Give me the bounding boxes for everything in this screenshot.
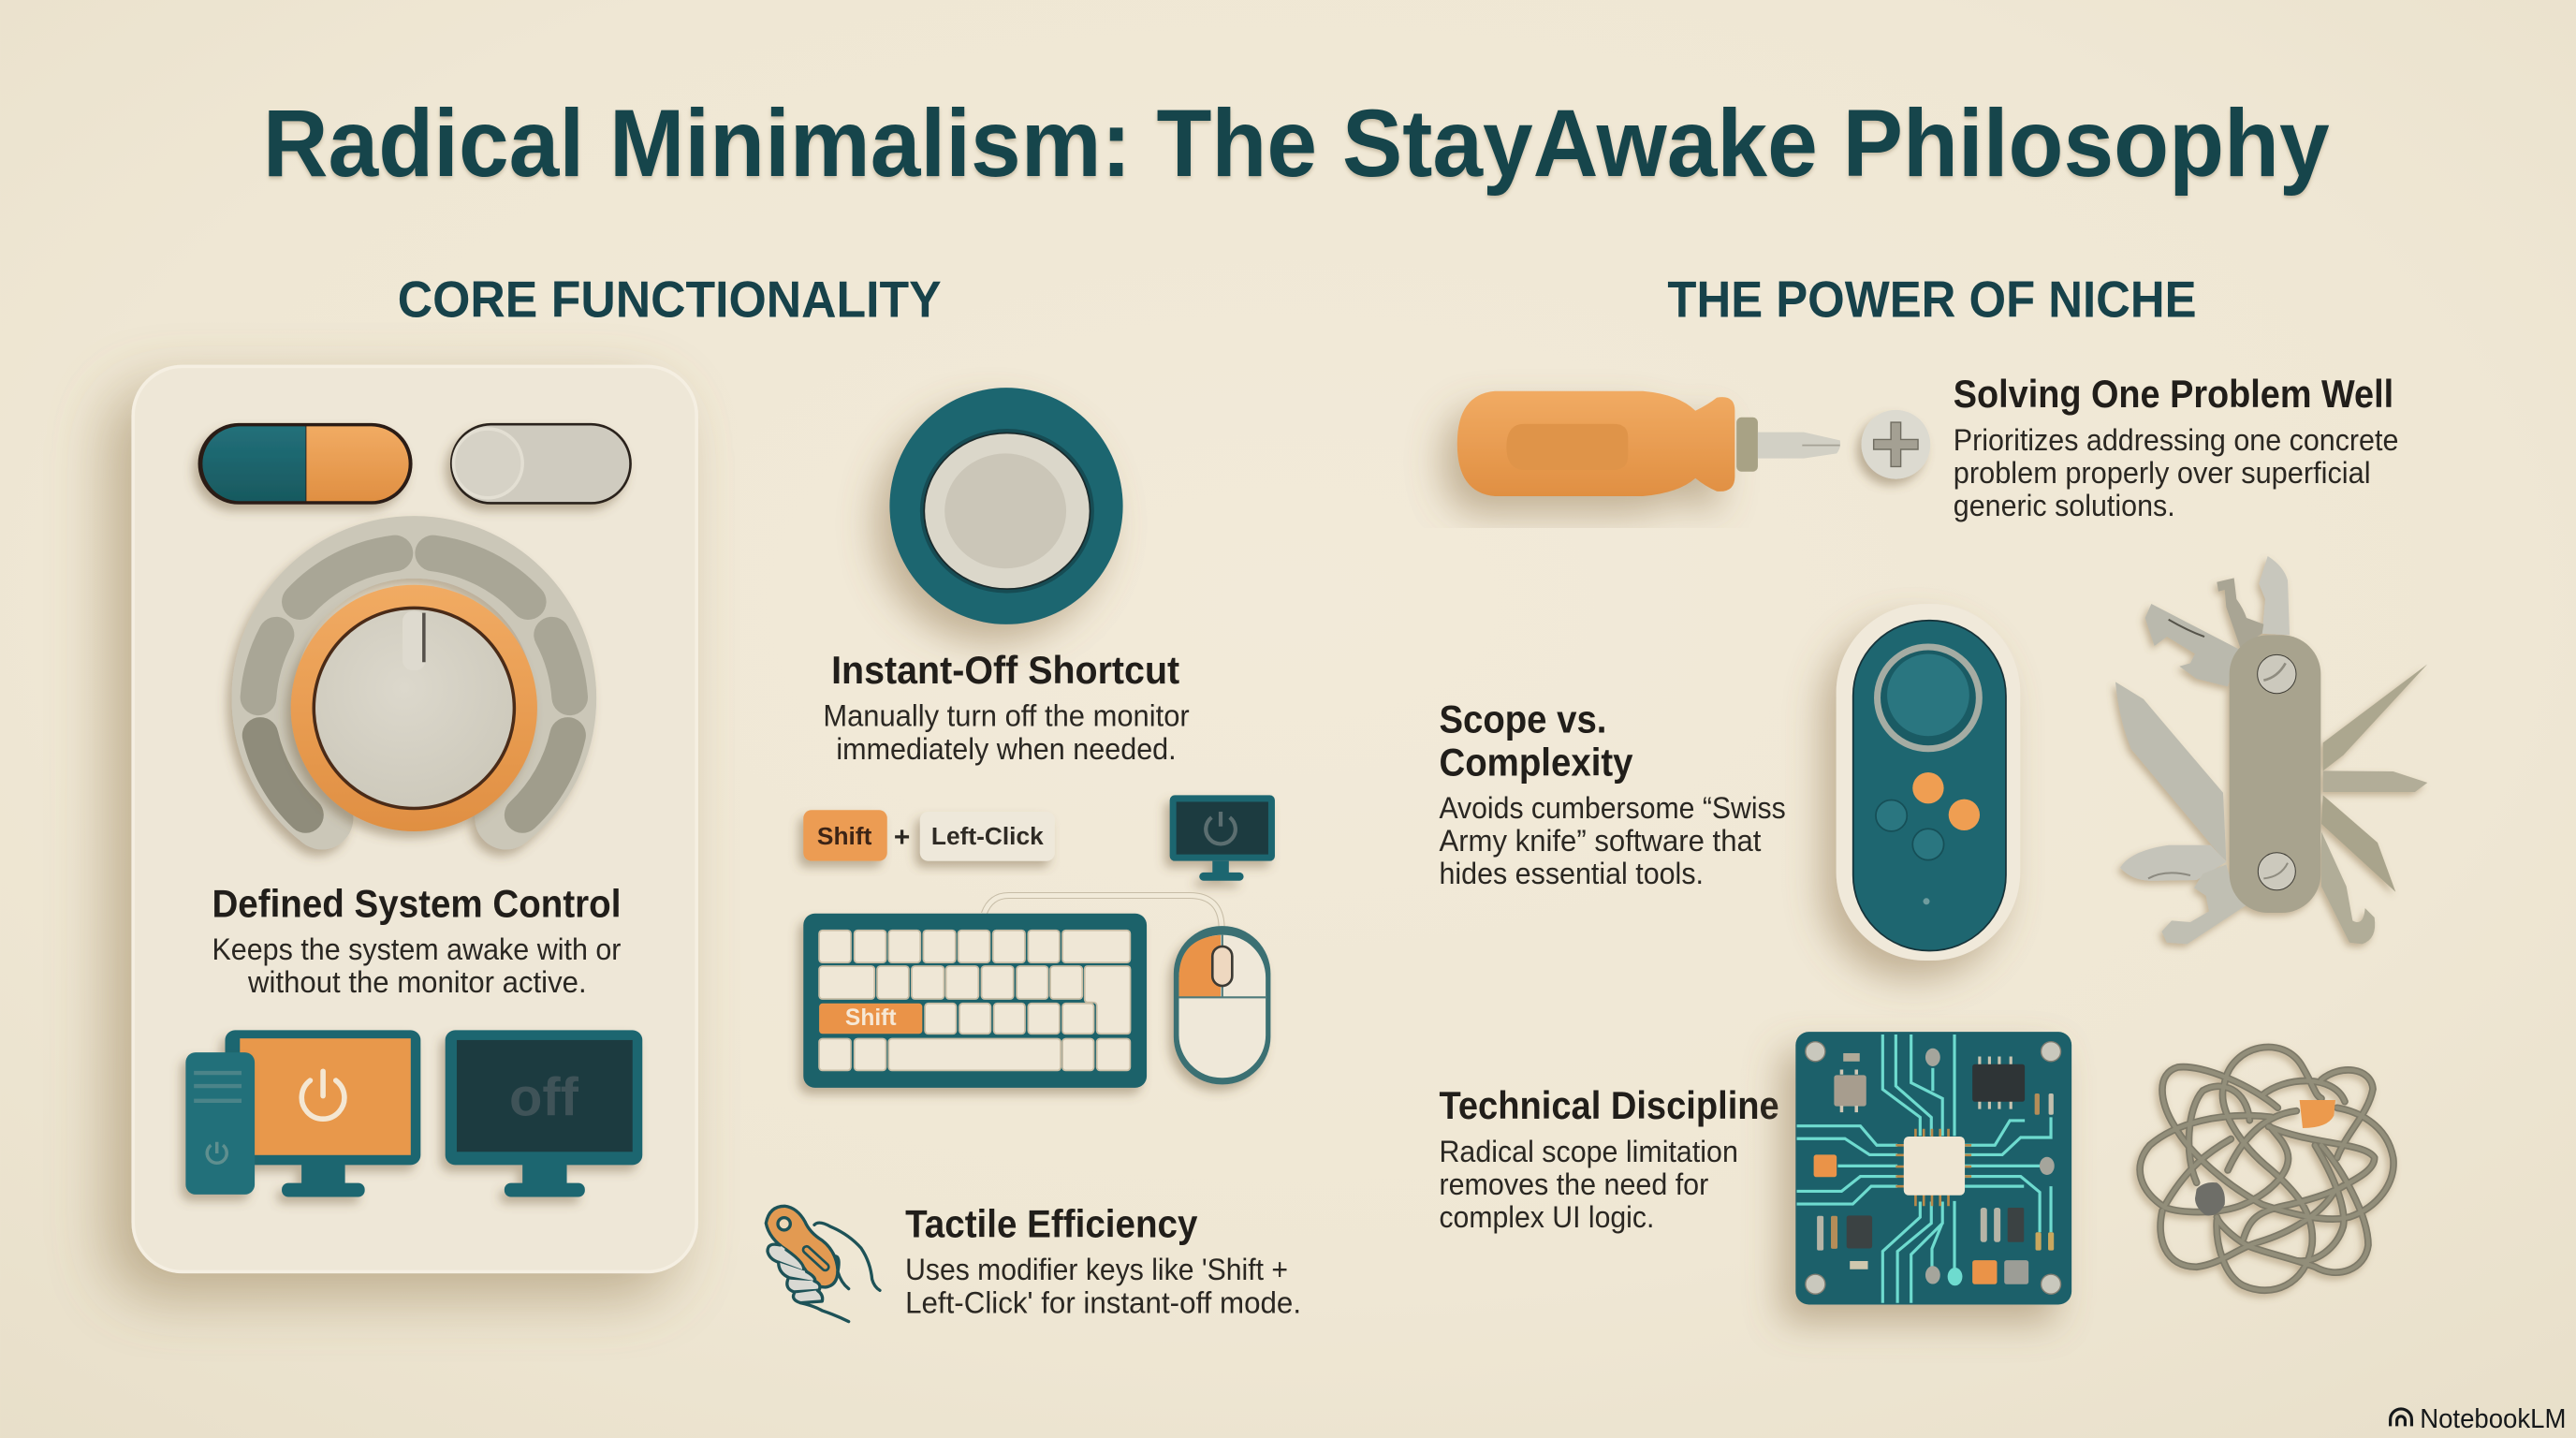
logo: NotebookLM: NotebookLM: [2420, 1404, 2566, 1434]
text: scope vs complexity: [1439, 697, 1786, 890]
icon: monitor off: [446, 1030, 642, 1197]
text: technical discipline: Radical scope limitation: [1439, 1135, 1738, 1168]
icon: hand pressing key: [766, 1206, 880, 1322]
text: defined system control: [212, 881, 622, 999]
heading: core functionality: CORE FUNCTIONALITY: [398, 271, 942, 329]
title: Radical Minimalism: The StayAwake Philosophy: [263, 90, 2330, 197]
toggle: teal and orange: [198, 423, 413, 505]
icon: swiss army knife: [2115, 556, 2427, 944]
key: left-click: Left-Click: [931, 822, 1044, 850]
keys: [819, 931, 1131, 1070]
text: scope vs complexity: hides essential tools.: [1439, 857, 1704, 890]
text: tactile efficiency: Left-Click' for instant-off mode.: [905, 1285, 1301, 1319]
text: scope vs complexity: Army knife” software that: [1439, 824, 1761, 858]
text: defined system control: Keeps the system awake with or: [212, 932, 622, 966]
key: left-click: [920, 812, 1055, 861]
icon: screwdriver: [1457, 391, 1840, 496]
text: solving one problem well: Solving One Problem Well: [1954, 372, 2393, 416]
text: scope vs complexity: Scope vs.: [1439, 697, 1606, 741]
icon: screw: [1862, 410, 1930, 479]
plus sign: +: [894, 822, 910, 853]
icon: single-purpose remote: [1837, 604, 2020, 961]
keyboard: [803, 914, 1147, 1088]
text: technical discipline: complex UI logic.: [1439, 1200, 1654, 1234]
text: defined system control: Defined System Control: [212, 881, 621, 925]
text: scope vs complexity: Complexity: [1439, 740, 1633, 784]
text: tactile efficiency: [905, 1202, 1301, 1319]
text: solving one problem well: Prioritizes addressing one concrete: [1954, 423, 2398, 457]
icon: instant-off button: [889, 388, 1123, 624]
board components: [1806, 1042, 2061, 1294]
toggle: grey off switch: [450, 423, 632, 505]
text: solving one problem well: generic solutions.: [1954, 489, 2175, 522]
key: shift: Shift: [817, 822, 872, 850]
text: technical discipline: [1439, 1083, 1779, 1234]
text: instant-off shortcut: immediately when needed.: [836, 732, 1177, 766]
dial control: [258, 547, 570, 831]
text: technical discipline: removes the need for: [1439, 1167, 1708, 1201]
text: defined system control: without the monitor active.: [247, 965, 587, 999]
keyboard: Shift: [845, 1005, 897, 1031]
text: technical discipline: Technical Discipline: [1439, 1083, 1779, 1127]
icon: tangled wire: [2140, 1047, 2393, 1290]
text: instant-off shortcut: Instant-Off Shortcut: [831, 648, 1179, 692]
text: instant-off shortcut: [823, 648, 1190, 766]
icon: circuit board: [1795, 1032, 2071, 1304]
circuit traces: [1797, 1034, 2051, 1303]
heading: the power of niche: THE POWER OF NICHE: [1667, 271, 2197, 329]
text: scope vs complexity: Avoids cumbersome “Swiss: [1439, 791, 1786, 825]
icon: monitor on with tower: [185, 1030, 420, 1197]
icon: small monitor off: [1170, 795, 1275, 881]
key: shift: [803, 810, 887, 861]
cable between keyboard and mouse: [984, 895, 1222, 927]
text: instant-off shortcut: Manually turn off the monitor: [823, 699, 1190, 733]
mouse: [1174, 926, 1270, 1084]
text: tactile efficiency: Tactile Efficiency: [905, 1202, 1198, 1246]
text: solving one problem well: [1954, 372, 2398, 522]
text: solving one problem well: problem properly over superficial: [1954, 456, 2371, 490]
icon: monitor off: off: [509, 1068, 579, 1128]
text: tactile efficiency: Uses modifier keys like 'Shift +: [905, 1253, 1288, 1286]
panel: defined system control: [133, 366, 696, 1271]
microchip: [1895, 1129, 1971, 1206]
